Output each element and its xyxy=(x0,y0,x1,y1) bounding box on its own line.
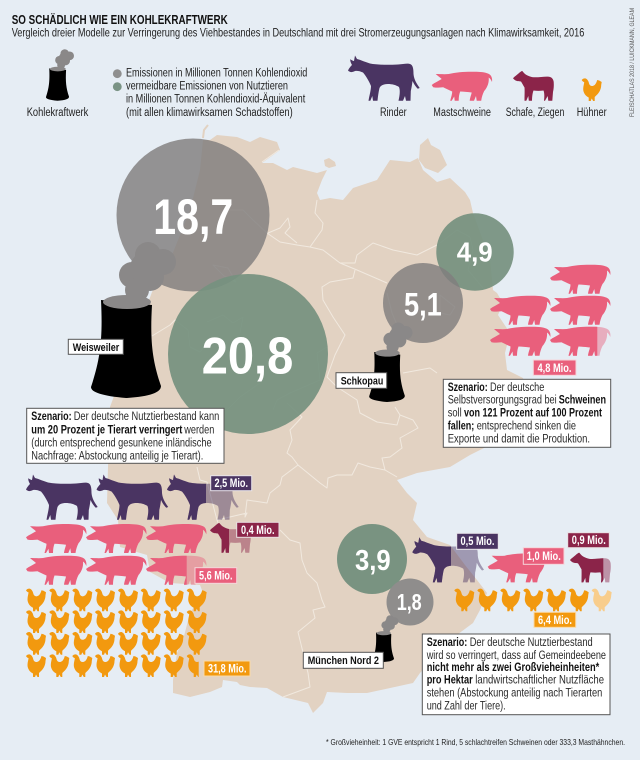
scenario box: Weisweiler: (durch entsprechend gesunkene inländische xyxy=(31,436,212,450)
cattle: 0,5 Mio. xyxy=(460,536,494,548)
legend: circle colours: Emissionen in Millionen Tonnen Kohlendioxid xyxy=(126,68,307,80)
chickens: 31,8 Mio. xyxy=(208,664,246,676)
legend: animals: Mastschweine xyxy=(433,107,491,119)
circle: Schkopau emissions xyxy=(383,263,463,343)
pig: 1,0 Mio. xyxy=(527,551,561,563)
chickens: 6,4 Mio. xyxy=(538,615,572,627)
chickens xyxy=(454,589,612,627)
circle: Weisweiler emissions: 18,7 xyxy=(153,189,233,245)
scenario box: München: und Zahl der Tiere). xyxy=(427,698,506,712)
cattle row: 2,5 Mio. xyxy=(214,478,248,490)
circle: Schkopau emissions: 5,1 xyxy=(404,287,442,323)
animals: Weisweiler scenario xyxy=(26,474,279,677)
legend: power plant xyxy=(27,49,88,119)
scenario box: München: pro Hektar xyxy=(427,672,473,686)
power plant: Schkopau xyxy=(336,322,412,402)
scenario box: München xyxy=(422,634,610,715)
scenario box: Schkopau: Exporte und damit die Produktion. xyxy=(448,431,590,445)
scenario box: München: Der deutsche Nutztierbestand xyxy=(470,635,593,649)
legend: circle colours xyxy=(113,68,307,119)
scenario box: Schkopau: soll xyxy=(448,406,462,420)
animals: Schkopau scenario xyxy=(490,265,610,375)
sheep: 0,9 Mio. xyxy=(572,535,606,547)
power plant: München Nord 2 xyxy=(303,615,398,668)
scenario box: Schkopau: fallen; xyxy=(448,419,474,433)
scenario box: Weisweiler: Szenario: xyxy=(31,409,72,423)
circle: Schkopau avoidable emissions: 4,9 xyxy=(457,237,493,268)
legend: power plant: Kohlekraftwerk xyxy=(27,107,88,119)
circle: Weisweiler emissions xyxy=(116,138,270,292)
circle: Weisweiler avoidable emissions: 20,8 xyxy=(202,327,293,385)
pig xyxy=(488,548,564,582)
power plant: Schkopau: Schkopau xyxy=(341,375,383,387)
scenario box: München: landwirtschaftlicher Nutzfläche xyxy=(475,672,604,686)
scenario box: Weisweiler: um 20 Prozent je Tierart verringert xyxy=(31,422,182,436)
scenario box: Weisweiler: Der deutsche Nutztierbestand kann xyxy=(74,409,219,423)
cattle row xyxy=(26,474,252,520)
circle: Weisweiler avoidable emissions xyxy=(168,274,328,434)
animals: München scenario xyxy=(412,533,612,627)
circle: Schkopau avoidable emissions xyxy=(436,213,514,291)
circle: München emissions: 1,8 xyxy=(397,589,422,615)
scenario box: Schkopau: Der deutsche xyxy=(490,380,544,394)
scenario box: Schkopau xyxy=(443,379,611,447)
circle: München avoidable emissions: 3,9 xyxy=(355,545,391,577)
circle: München emissions xyxy=(386,578,434,626)
scenario box: Weisweiler: Nachfrage: Abstockung anteilig je Tierart). xyxy=(31,448,203,462)
chickens xyxy=(26,589,250,677)
legend: circle colours: vermeidbare Emissionen von Nutztieren xyxy=(126,81,288,93)
scenario box: Weisweiler xyxy=(27,408,224,463)
legend: animals: Schafe, Ziegen xyxy=(506,107,564,119)
pig rows xyxy=(26,524,237,585)
scenario box: München: Szenario: xyxy=(427,635,467,649)
power plant: München Nord 2: München Nord 2 xyxy=(308,655,379,667)
circle: München avoidable emissions xyxy=(337,524,407,594)
sheep xyxy=(210,522,279,553)
scenario box: Schkopau: Selbstversorgungsgrad bei xyxy=(448,393,557,407)
legend: circle colours: in Millionen Tonnen Kohlendioxid-Äquivalent xyxy=(126,94,306,106)
scenario box: Schkopau: Schweinen xyxy=(559,393,606,407)
cattle xyxy=(412,533,498,582)
power plant: Weisweiler xyxy=(68,242,176,398)
scenario box: Schkopau: entsprechend sinken die xyxy=(477,419,576,433)
sheep: 0,4 Mio. xyxy=(241,525,274,537)
title: SO SCHÄDLICH WIE EIN KOHLEKRAFTWERK xyxy=(12,12,228,27)
animals: Schkopau scenario: 4,8 Mio. xyxy=(538,363,572,375)
scenario box: Schkopau: Szenario: xyxy=(448,380,488,394)
legend: animals xyxy=(348,56,607,119)
pig rows: 5,6 Mio. xyxy=(199,570,232,582)
legend: circle colours: (mit allen klimawirksamen Schadstoffen) xyxy=(126,107,293,119)
map of Germany xyxy=(107,125,530,713)
scenario box: Weisweiler: werden xyxy=(184,422,214,436)
sheep xyxy=(568,533,611,582)
legend: animals: Rinder xyxy=(380,107,407,119)
legend: animals: Hühner xyxy=(577,107,607,119)
power plant: Weisweiler: Weisweiler xyxy=(73,342,120,354)
